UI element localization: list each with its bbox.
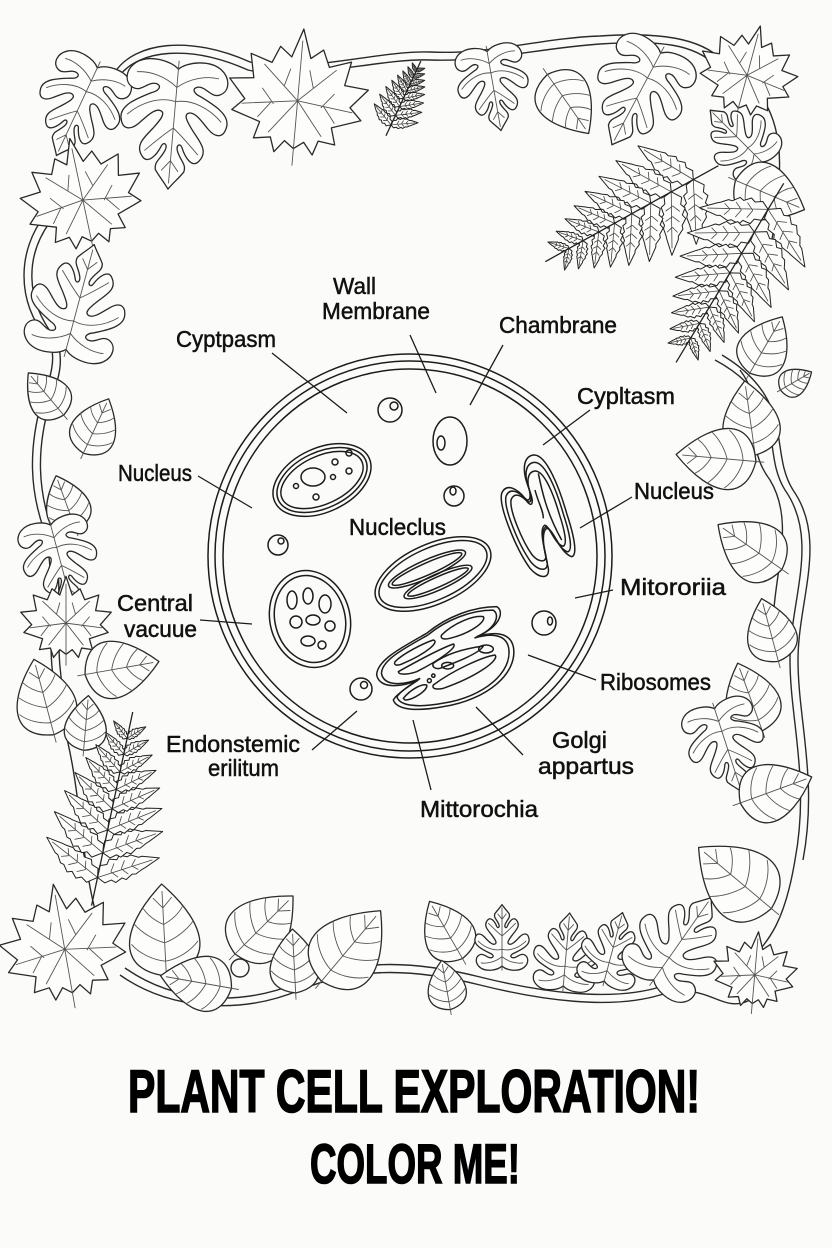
subtitle: COLOR ME! xyxy=(310,1132,520,1195)
leaves: right border xyxy=(515,87,832,833)
diagram labels: vacuue xyxy=(124,616,197,642)
diagram labels xyxy=(117,273,726,822)
diagram labels: erilitum xyxy=(208,755,279,781)
diagram labels: Nucleus xyxy=(118,460,192,486)
diagram labels: Nucleus xyxy=(634,478,714,504)
diagram labels: Cyptpasm xyxy=(176,326,276,352)
diagram labels: Endonstemic xyxy=(166,731,300,757)
leader lines xyxy=(198,335,632,790)
organelle: upper-left chloroplast xyxy=(261,429,383,531)
organelle: lower-left vacuole xyxy=(259,561,361,677)
vine border xyxy=(24,35,810,1006)
leaves: bottom border xyxy=(0,820,802,1019)
diagram labels: Cypltasm xyxy=(577,383,675,409)
diagram labels: Mitororiia xyxy=(620,574,726,600)
leaves: left border xyxy=(5,232,193,919)
leaves: top border xyxy=(10,13,808,268)
diagram labels: Ribosomes xyxy=(600,669,711,695)
diagram labels: Mittorochia xyxy=(420,796,538,822)
diagram labels: Membrane xyxy=(322,298,430,324)
diagram labels: appartus xyxy=(538,753,634,779)
diagram labels: Nucleclus xyxy=(349,514,446,540)
cell wall and membrane xyxy=(208,354,612,758)
organelle: lower large golgi stack xyxy=(377,607,514,709)
diagram labels: Wall xyxy=(333,273,376,299)
diagram labels: Chambrane xyxy=(499,312,617,338)
plant cell diagram xyxy=(208,354,612,758)
organelle: central mitochondrion xyxy=(364,521,502,627)
diagram labels: Golgi xyxy=(552,727,607,753)
organelle: right golgi xyxy=(501,455,575,576)
vesicles xyxy=(268,398,556,700)
diagram labels: Central xyxy=(117,590,193,616)
